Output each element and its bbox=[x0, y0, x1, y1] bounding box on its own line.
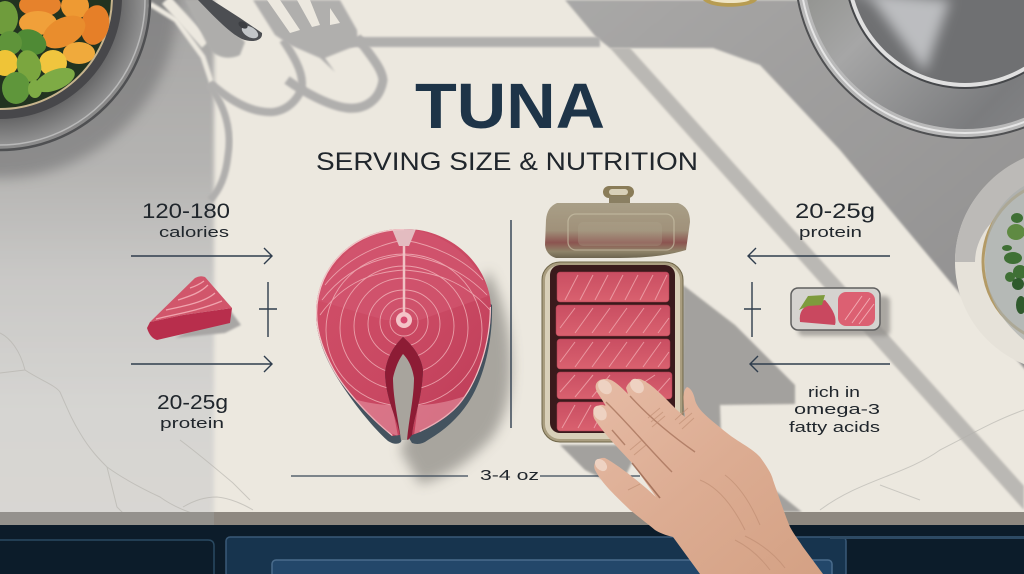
can and hand shadow bbox=[560, 285, 802, 512]
knuckles bbox=[628, 408, 785, 570]
left callout: calories: calories bbox=[159, 224, 229, 241]
icon: tray of tuna bbox=[791, 288, 890, 336]
counter front edge bbox=[0, 512, 1024, 526]
left callout: calories: 120-180 bbox=[142, 200, 230, 223]
left callout: protein bbox=[157, 392, 228, 432]
right callout: omega-3: fatty acids bbox=[789, 419, 880, 436]
arrow: calories to steak bbox=[131, 248, 272, 264]
can body bbox=[542, 262, 683, 442]
icon: tuna wedge bbox=[147, 276, 241, 340]
center divider line bbox=[510, 220, 512, 428]
right callout: omega-3: rich in bbox=[808, 384, 860, 401]
left callout: protein: 20-25g bbox=[157, 392, 228, 414]
right callout: omega-3: omega-3 bbox=[794, 401, 880, 418]
left callout: protein: protein bbox=[160, 415, 224, 432]
bowl of vegetables bbox=[0, 0, 150, 150]
right callout: protein: protein bbox=[799, 224, 862, 241]
dimension line: 3-4 oz bbox=[291, 475, 640, 477]
left callout: calories bbox=[142, 200, 230, 241]
stainless pot lid bbox=[795, 0, 1024, 138]
navy cabinet bbox=[0, 525, 1024, 574]
right plus marker bbox=[744, 282, 761, 337]
left plus marker bbox=[259, 282, 277, 337]
marble veins bbox=[0, 333, 1024, 523]
serving size label: 3-4 oz bbox=[480, 467, 539, 484]
spoon handle bbox=[198, 0, 262, 41]
can lid bbox=[545, 186, 690, 258]
right callout: protein bbox=[795, 200, 875, 241]
right callout: protein: 20-25g bbox=[795, 200, 875, 223]
hand bbox=[590, 376, 823, 574]
tuna can bbox=[542, 186, 690, 442]
arrow: protein to can bbox=[748, 248, 890, 264]
steak shadow bbox=[400, 270, 511, 484]
title: TUNA bbox=[415, 70, 605, 142]
small gold dish at top edge bbox=[703, 0, 757, 7]
arrow: protein to steak bbox=[131, 356, 272, 372]
arrow: omega-3 to can bbox=[750, 356, 890, 372]
fillets bbox=[556, 272, 672, 431]
tuna steak bbox=[310, 225, 500, 445]
side plate with greens bbox=[955, 152, 1024, 372]
fingernails bbox=[590, 376, 647, 473]
right callout: omega-3 bbox=[789, 384, 880, 436]
subtitle: SERVING SIZE & NUTRITION bbox=[316, 148, 698, 176]
